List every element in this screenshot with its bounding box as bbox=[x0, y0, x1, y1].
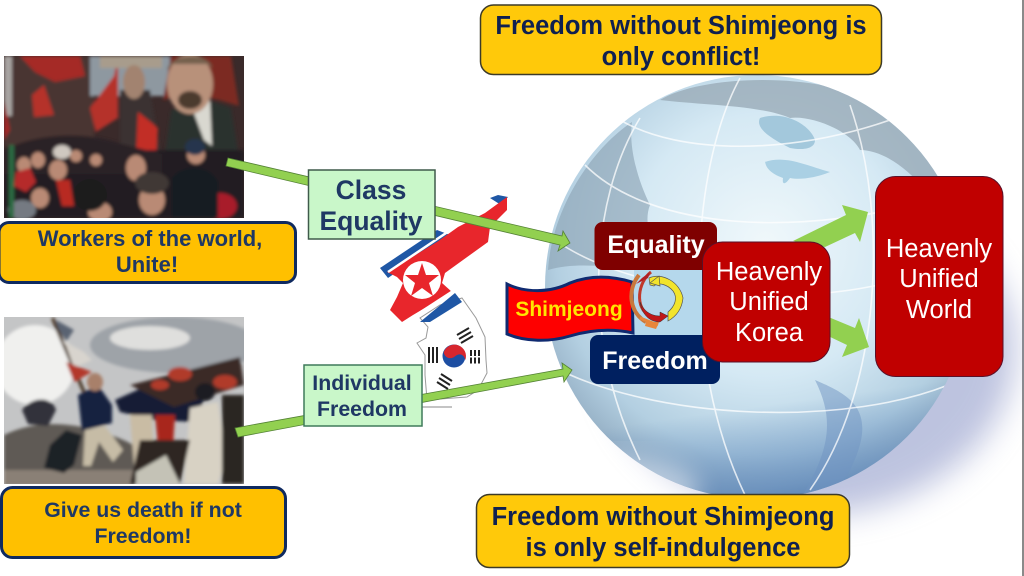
callout: give us death: Give us death if not bbox=[44, 498, 242, 522]
box: freedom: Freedom bbox=[602, 347, 708, 375]
callout: freedom without shimjeong is only conflict: only conflict! bbox=[602, 43, 760, 71]
box: heavenly unified world bbox=[876, 176, 1003, 376]
label: individual freedom bbox=[304, 365, 422, 426]
callout: workers of the world bbox=[0, 222, 296, 282]
korea map bbox=[380, 195, 508, 407]
south korea bbox=[395, 298, 487, 407]
box: heavenly unified korea: Korea bbox=[735, 319, 804, 347]
callout: freedom without shimjeong is only conflict bbox=[480, 5, 882, 74]
box: equality bbox=[594, 222, 717, 270]
photo: French revolutionary battle painting bbox=[0, 317, 260, 485]
box: heavenly unified korea: Unified bbox=[729, 288, 809, 316]
callout: freedom without shimjeong is only conflict: Freedom without Shimjeong is bbox=[495, 12, 867, 40]
label: individual freedom: Individual bbox=[312, 371, 412, 395]
north america land bbox=[660, 80, 938, 176]
north korea bbox=[380, 195, 508, 322]
box: equality: Equality bbox=[607, 231, 705, 259]
box: heavenly unified world: Heavenly bbox=[886, 235, 992, 263]
light panel behind cycle arrows bbox=[634, 268, 704, 336]
arrow: individual freedom line bbox=[235, 363, 572, 437]
callout: freedom without shimjeong is only self-indulgence bbox=[476, 494, 850, 568]
callout: give us death bbox=[2, 488, 286, 558]
box: freedom bbox=[590, 335, 720, 384]
arrow: korea to world lower bbox=[826, 316, 869, 357]
label: individual freedom: Freedom bbox=[317, 397, 407, 421]
arrow: korea to world upper bbox=[793, 205, 868, 247]
box: heavenly unified world: World bbox=[906, 296, 972, 324]
callout: workers of the world: Unite! bbox=[116, 252, 178, 277]
banner: shimjeong: Shimjeong bbox=[515, 298, 623, 321]
box: heavenly unified world: Unified bbox=[899, 265, 979, 293]
icon: cycle arrows bbox=[631, 272, 683, 329]
banner: shimjeong bbox=[507, 277, 633, 340]
box: heavenly unified korea: Heavenly bbox=[716, 258, 822, 286]
callout: freedom without shimjeong is only self-indulgence: Freedom without Shimjeong bbox=[492, 503, 834, 531]
globe bbox=[500, 75, 1024, 525]
arrow: class equality line bbox=[226, 158, 570, 251]
label: class equality: Class bbox=[336, 175, 406, 205]
callout: workers of the world: Workers of the world, bbox=[38, 226, 262, 251]
callout: give us death: Freedom! bbox=[94, 524, 192, 548]
callout: freedom without shimjeong is only self-indulgence: is only self-indulgence bbox=[526, 534, 800, 562]
label: class equality: Equality bbox=[319, 206, 423, 236]
label: class equality bbox=[308, 170, 435, 239]
box: heavenly unified korea bbox=[702, 242, 830, 362]
photo: workers crowd with Lenin portraits bbox=[4, 54, 244, 222]
